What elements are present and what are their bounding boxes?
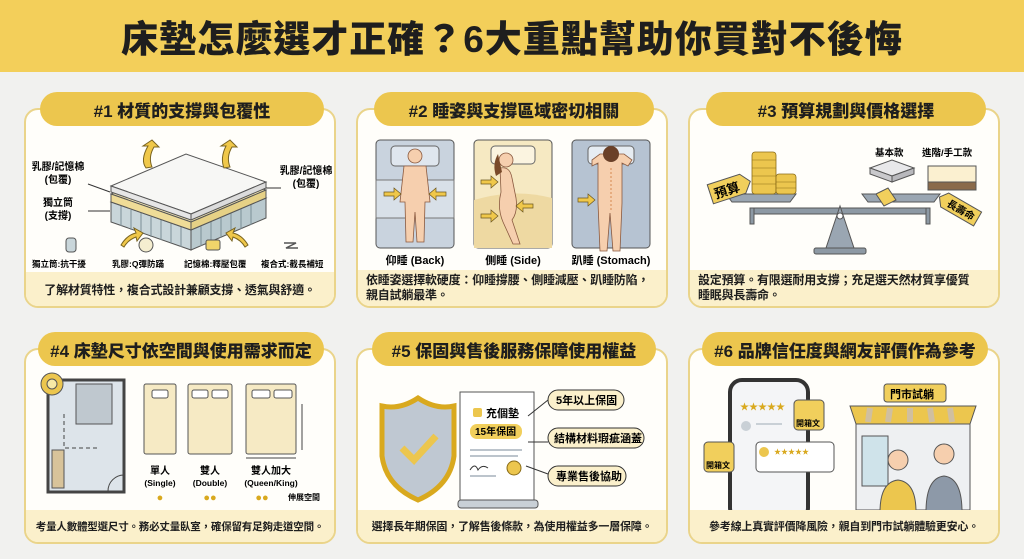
illustration: phone reviews and store: 開箱文 xyxy=(796,418,820,428)
caption xyxy=(358,510,666,542)
illustration: shield and certificate: 15年保固 xyxy=(475,425,516,438)
illustration: shield and certificate: 5年以上保固 xyxy=(556,393,617,407)
pill: #1 heading: #1 材質的支撐與包覆性 xyxy=(94,102,270,120)
caption xyxy=(26,272,334,306)
illustration: three sleep postures: 趴睡 (Stomach) xyxy=(572,254,651,267)
illustration: balance scale: 進階/手工款 xyxy=(922,147,973,159)
illustration: mattress layers: 乳膠/記憶棉 xyxy=(32,160,84,173)
illustration: room and bed sizes: 伸展空間 xyxy=(288,492,320,502)
panel: #2 sleep posture xyxy=(356,108,668,308)
pill: #6 heading: #6 品牌信任度與網友評價作為參考 xyxy=(714,342,976,360)
panel: #3 budget xyxy=(688,108,1000,308)
illustration: shield and certificate: 結構材料瑕疵涵蓋 xyxy=(554,431,642,445)
illustration: mattress layers: 獨立筒:抗干擾 xyxy=(32,259,86,269)
illustration: phone reviews and store: ★★★★★ xyxy=(740,402,785,412)
pill: #4 heading: #4 床墊尺寸依空間與使用需求而定 xyxy=(50,342,312,360)
illustration: room and bed sizes: ● xyxy=(157,492,163,504)
panel: #5 warranty xyxy=(356,348,668,544)
illustration: mattress layers: 獨立筒 xyxy=(43,196,73,209)
panel: #6 brand & reviews xyxy=(688,348,1000,544)
pill: #6 heading xyxy=(702,332,988,366)
pill: #5 heading xyxy=(372,332,656,366)
pill: #2 heading: #2 睡姿與支撐區域密切相關 xyxy=(409,102,619,120)
illustration: balance scale xyxy=(706,147,982,254)
pill: #3 heading: #3 預算規劃與價格選擇 xyxy=(758,102,934,120)
illustration: mattress layers: 記憶棉:釋壓包覆 xyxy=(184,259,247,269)
illustration: shield and certificate xyxy=(380,390,644,508)
illustration: room and bed sizes: (Single) xyxy=(144,478,176,488)
illustration: three sleep postures: 仰睡 (Back) xyxy=(386,253,445,267)
pill: #4 heading xyxy=(38,332,324,366)
pill: #3 heading xyxy=(706,92,986,126)
illustration: phone reviews and store: 門市試躺 xyxy=(890,387,934,401)
illustration: mattress layers: 乳膠:Q彈防蹣 xyxy=(112,259,164,269)
pill: #5 heading: #5 保固與售後服務保障使用權益 xyxy=(392,342,636,360)
caption xyxy=(358,270,666,306)
illustration: mattress layers: (支撐) xyxy=(45,209,71,222)
caption: 了解材質特性，複合式設計兼顧支撐、透氣與舒適。 xyxy=(44,282,316,296)
caption xyxy=(690,510,998,542)
illustration: phone reviews and store: ★★★★★ xyxy=(774,448,809,456)
illustration: balance scale: 長壽命 xyxy=(945,197,977,223)
panel: #4 size xyxy=(24,348,336,544)
caption: 親自試躺最準。 xyxy=(366,288,449,302)
caption: 考量人數體型選尺寸。務必丈量臥室，確保留有足夠走道空間。 xyxy=(36,520,324,532)
illustration: phone reviews and store: 開箱文 xyxy=(706,460,730,470)
illustration: shield and certificate: 充個墊 xyxy=(486,406,519,420)
illustration: room and bed sizes: (Queen/King) xyxy=(244,478,298,488)
caption: 睡眠與長壽命。 xyxy=(698,288,781,302)
illustration: phone reviews and store xyxy=(704,378,977,510)
caption: 參考線上真實評價降風險，親自到門市試躺體驗更安心。 xyxy=(709,521,979,533)
caption: 選擇長年期保固，了解售後條款，為使用權益多一層保障。 xyxy=(372,521,652,533)
illustration: balance scale: 預算 xyxy=(712,179,742,202)
illustration: room and bed sizes: (Double) xyxy=(193,478,227,488)
caption xyxy=(26,510,334,542)
pill: #2 heading xyxy=(374,92,654,126)
illustration: mattress layers xyxy=(32,139,332,269)
illustration: balance scale: 基本款 xyxy=(875,147,904,159)
illustration: mattress layers: 乳膠/記憶棉 xyxy=(280,164,332,177)
pill: #1 heading xyxy=(40,92,324,126)
caption: 依睡姿選擇軟硬度：仰睡撐腰、側睡減壓、趴睡防陷， xyxy=(366,273,649,287)
illustration: mattress layers: (包覆) xyxy=(45,173,71,186)
caption: 設定預算。有限選耐用支撐；充足選天然材質享優質 xyxy=(698,273,969,287)
panel: #1 material xyxy=(24,108,336,308)
illustration: room and bed sizes: ●● xyxy=(203,492,217,504)
illustration: room and bed sizes xyxy=(40,372,320,504)
illustration: three sleep postures: 側睡 (Side) xyxy=(485,254,541,267)
illustration: room and bed sizes: 雙人 xyxy=(200,464,220,477)
title: 床墊怎麼選才正確？6大重點幫助你買對不後悔 xyxy=(121,19,903,60)
illustration: mattress layers: (包覆) xyxy=(293,177,319,190)
caption xyxy=(690,270,998,306)
illustration: three sleep postures xyxy=(376,140,651,267)
illustration: room and bed sizes: ●● xyxy=(255,492,269,504)
title xyxy=(0,0,1024,72)
illustration: room and bed sizes: 雙人加大 xyxy=(251,464,291,477)
illustration: shield and certificate: 專業售後協助 xyxy=(556,469,622,483)
illustration: mattress layers: 複合式:截長補短 xyxy=(261,259,324,269)
illustration: room and bed sizes: 單人 xyxy=(150,465,170,477)
